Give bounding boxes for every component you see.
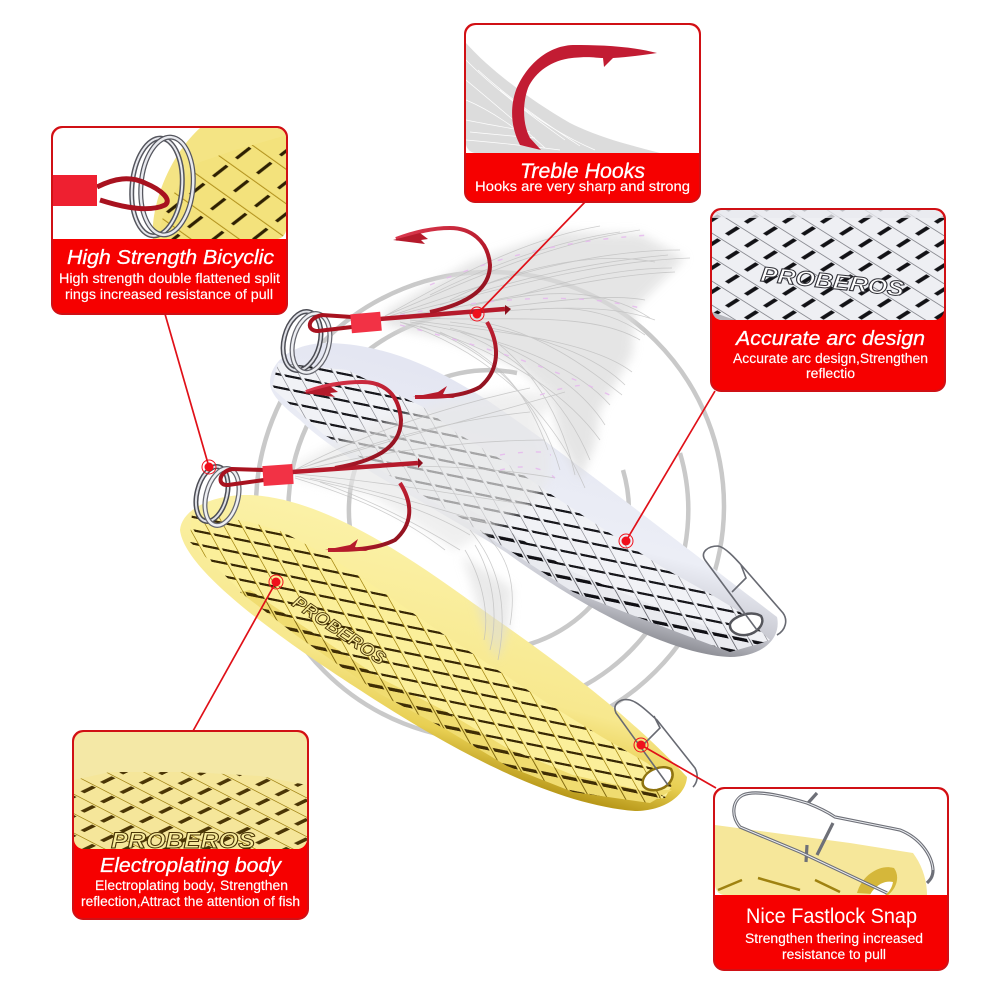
- panel: electroplating body: [73, 731, 308, 919]
- panel: treble hooks: [465, 24, 700, 202]
- snap close-up image: [715, 793, 933, 895]
- gold lure brand text: PROBEROS: [289, 592, 389, 669]
- silver body close-up image: [712, 210, 944, 320]
- description line 2: reflectio: [806, 366, 855, 381]
- silver body close-up image: PROBEROS: [759, 263, 905, 301]
- top treble hook: [277, 228, 511, 398]
- heading: Treble Hooks: [520, 160, 646, 183]
- background circles: [256, 272, 724, 740]
- description: Electroplating body, Strengthen: [95, 878, 288, 893]
- bottom hook thread: [262, 464, 294, 486]
- gold body close-up image: [74, 732, 307, 853]
- gold lure hole: [643, 767, 673, 790]
- description line 2: resistance to pull: [782, 947, 886, 962]
- bottom treble hook: [191, 382, 423, 551]
- silver spoon lure: [270, 343, 778, 657]
- gold spoon lure: [180, 495, 687, 811]
- panel: bicyclic split rings: [52, 127, 287, 314]
- description: Hooks are very sharp and strong: [475, 178, 690, 194]
- panel: accurate arc design: [711, 209, 945, 391]
- silver lure hole: [730, 614, 762, 635]
- heading: Electroplating body: [100, 854, 283, 877]
- connector lines: [165, 202, 716, 788]
- description: Accurate arc design,Strengthen: [733, 351, 928, 366]
- description line 2: reflection,Attract the attention of fish: [81, 894, 300, 909]
- heading: High Strength Bicyclic: [67, 246, 275, 269]
- description: Strengthen thering increased: [745, 931, 923, 946]
- split ring close-up image: [53, 128, 287, 239]
- feathers: [295, 226, 690, 660]
- callout dots: [202, 307, 648, 752]
- gold body close-up image: PROBEROS: [111, 828, 255, 853]
- gold lure snap: [615, 700, 697, 787]
- heading: Nice Fastlock Snap: [746, 905, 917, 928]
- panel: fastlock snap: [714, 788, 948, 970]
- bottom split ring: [191, 463, 245, 529]
- heading: Accurate arc design: [734, 327, 925, 350]
- top hook thread: [350, 312, 382, 333]
- top split ring: [277, 308, 336, 376]
- description: High strength double flattened split: [59, 270, 280, 286]
- silver lure snap: [703, 546, 786, 635]
- treble hook close-up image: [466, 43, 660, 153]
- description line 2: rings increased resistance of pull: [65, 286, 273, 302]
